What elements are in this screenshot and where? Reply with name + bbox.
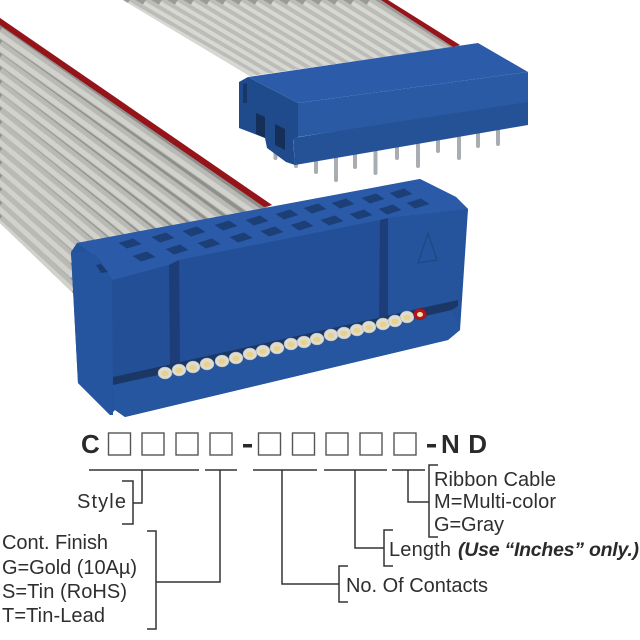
upper front xyxy=(298,72,528,137)
leader lines and brackets xyxy=(89,465,438,629)
label: contact finish xyxy=(2,532,137,627)
label: contact finish: T=Tin-Lead xyxy=(2,605,105,627)
label: length: Length xyxy=(389,539,451,561)
front panel centre xyxy=(179,220,380,362)
front panel right xyxy=(388,209,468,315)
lower lip xyxy=(113,310,460,417)
label: contact finish: Cont. Finish xyxy=(2,532,108,554)
contact slot xyxy=(113,300,458,386)
left side body xyxy=(239,77,298,165)
top face xyxy=(248,43,528,103)
lower front xyxy=(293,100,528,165)
part number: prefix, boxes and suffix xyxy=(81,429,487,459)
contacts xyxy=(158,308,426,379)
label: ribbon cable xyxy=(434,469,556,536)
label: contact finish: S=Tin (RoHS) xyxy=(2,581,127,603)
label: length: (Use “Inches” only.) xyxy=(458,539,639,561)
pins xyxy=(276,125,498,180)
male header connector xyxy=(239,43,528,180)
female IDC socket connector xyxy=(71,179,468,417)
grooves xyxy=(169,260,180,365)
part number: prefix, boxes and suffix: C xyxy=(81,429,100,459)
label: ribbon cable: M=Multi-color xyxy=(434,491,556,513)
triangle mark xyxy=(418,233,437,263)
body silhouette xyxy=(71,179,468,417)
top face xyxy=(77,179,468,280)
left face xyxy=(71,252,113,415)
part number: prefix, boxes and suffix: ND xyxy=(441,429,487,459)
label: contact finish: G=Gold (10Aµ) xyxy=(2,557,137,579)
label: number of contacts: No. Of Contacts xyxy=(346,575,488,597)
key notch xyxy=(96,264,108,273)
slots xyxy=(256,113,265,138)
front panel left xyxy=(112,265,170,377)
ribbon cable: lower xyxy=(0,18,272,295)
label: ribbon cable: Ribbon Cable xyxy=(434,469,556,491)
label: style: Style xyxy=(77,491,126,513)
label: ribbon cable: G=Gray xyxy=(434,514,504,536)
ribbon cable: upper xyxy=(123,0,460,81)
holes xyxy=(118,188,430,262)
